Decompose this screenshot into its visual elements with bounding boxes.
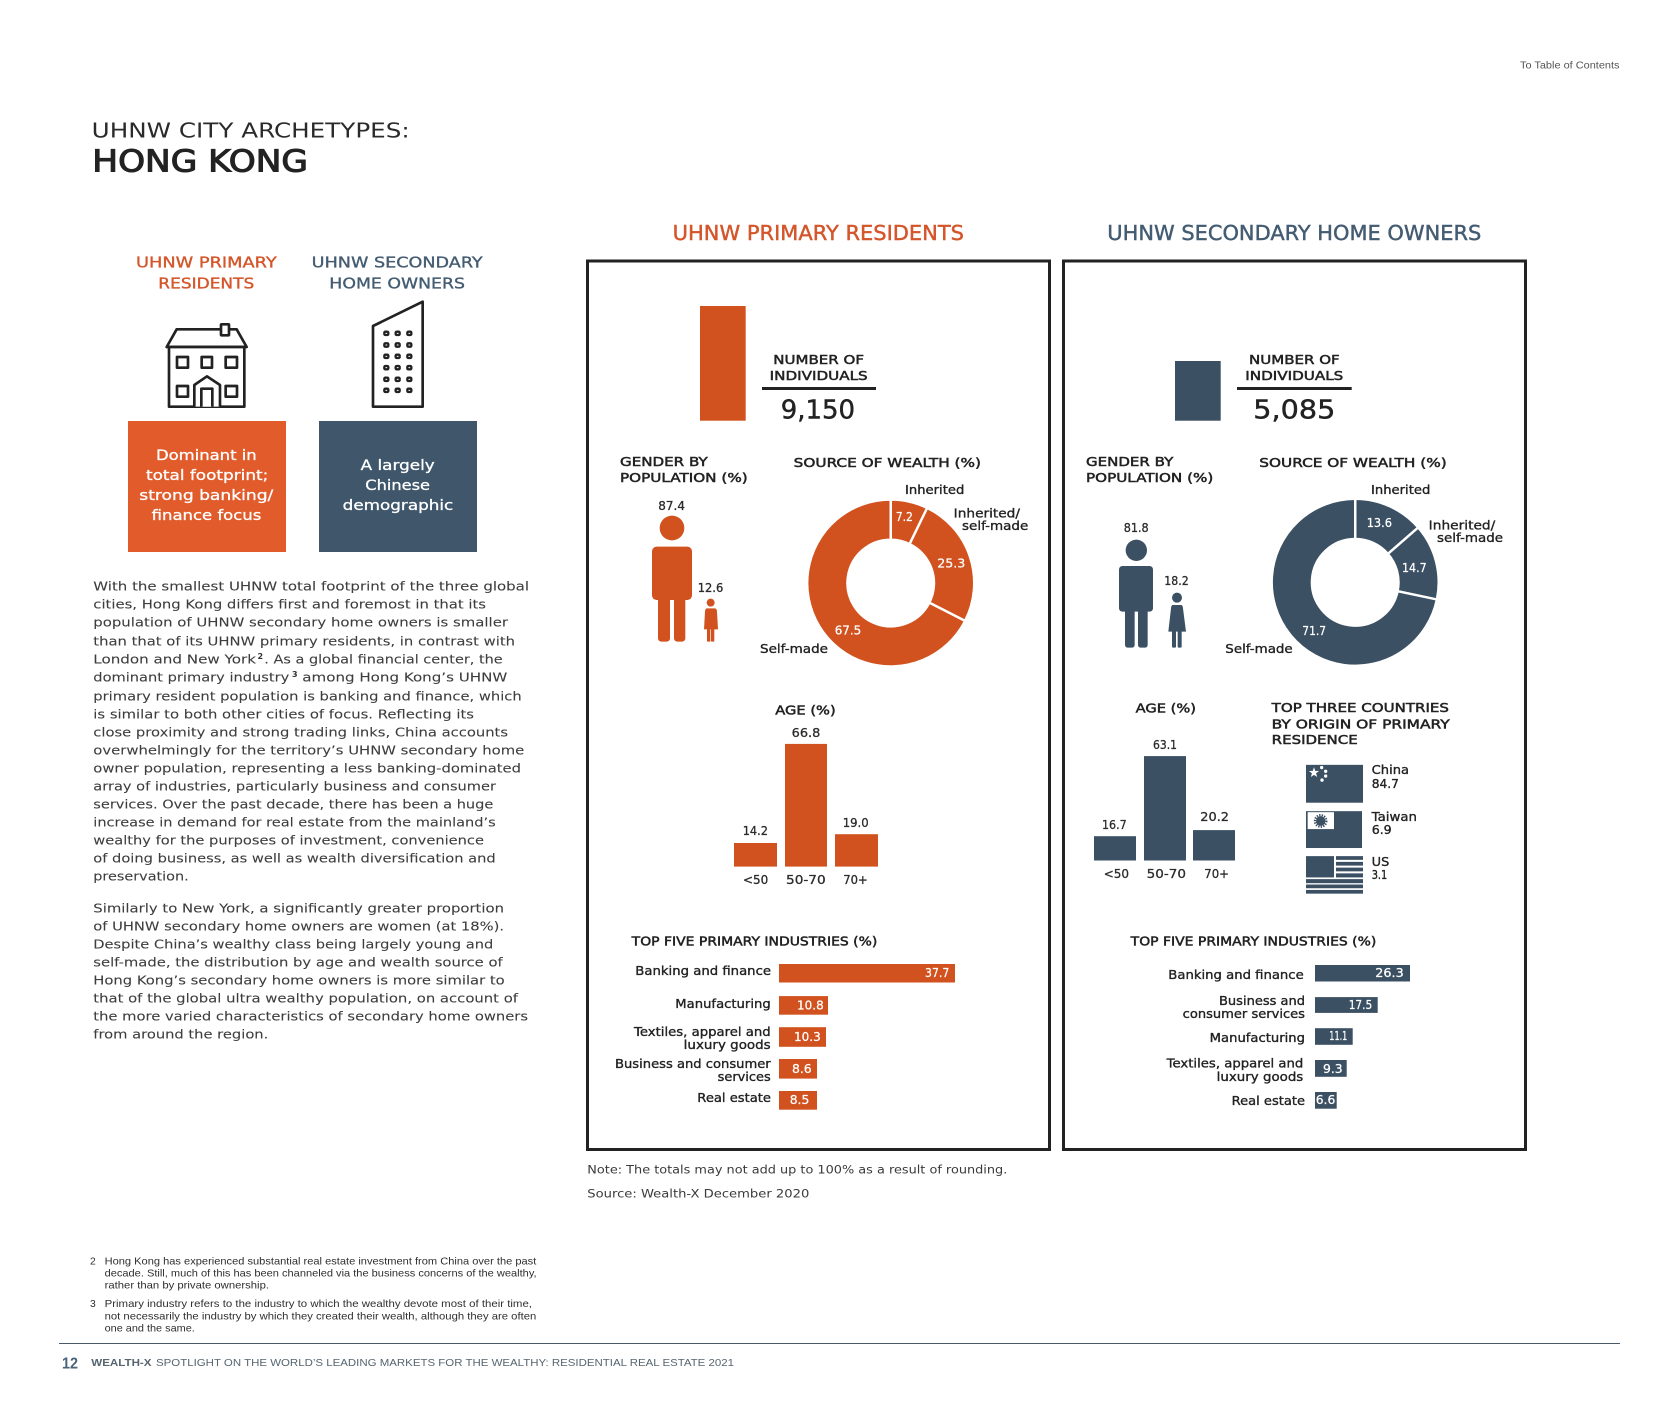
text block: body paragraph one: overwhelmingly for the territory’s UHNW secondary home [93, 743, 524, 758]
chart: top five primary industries: Banking and finance [635, 963, 771, 978]
heading: UHNW secondary home owners legend [312, 254, 484, 292]
chart: source of wealth donut: 13.6 [1367, 515, 1392, 530]
heading: gender: POPULATION (%) [1086, 471, 1213, 486]
chart: age bars: 70+ [1204, 866, 1229, 881]
text block: body paragraph two: from around the region. [93, 1027, 268, 1042]
heading: UHNW primary residents legend: UHNW PRIMARY [136, 254, 278, 272]
text block: body paragraph two: of UHNW secondary home owners are women (at 18%). [93, 919, 504, 934]
heading: secondary home owners panel: UHNW SECONDARY HOME OWNERS [1107, 221, 1481, 245]
icon: flag of Taiwan [1306, 811, 1362, 848]
chart: top five primary industries: 9.3 [1323, 1061, 1343, 1076]
stat: number of individuals: 5,085 [1253, 395, 1335, 425]
chart: source of wealth donut [1225, 482, 1503, 666]
icon: male figure [652, 516, 692, 642]
text block: body paragraph one: increase in demand for real estate from the mainland’s [93, 815, 496, 830]
heading: gender [1086, 455, 1213, 486]
chart: top five primary industries: Textiles, apparel and [633, 1024, 771, 1039]
heading: primary residents panel: UHNW PRIMARY RESIDENTS [673, 221, 964, 245]
page number: 12 [62, 1355, 78, 1372]
stat: number of individuals: INDIVIDUALS [770, 369, 868, 384]
chart: age bars: 50-70 [1147, 866, 1186, 881]
chart: top five primary industries: Real estate [697, 1090, 771, 1105]
text block: body paragraph one: population of UHNW secondary home owners is smaller [93, 615, 509, 630]
chart: gender pictogram: 87.4 [658, 498, 685, 513]
labels: country values: China [1372, 762, 1409, 777]
labels: country values: 3.1 [1372, 867, 1387, 882]
heading: gender [620, 455, 748, 486]
footnotes: 2 [90, 1256, 96, 1267]
footnotes: decade. Still, much of this has been channeled via the business concerns of the wealthy, [105, 1268, 537, 1279]
chart: source of wealth donut: 67.5 [835, 623, 861, 638]
chart: source of wealth donut [760, 482, 1029, 667]
icon: house [167, 324, 247, 407]
labels: country values: 6.9 [1372, 822, 1392, 837]
chart: source of wealth donut: self-made [1437, 530, 1503, 545]
stat: number of individuals: NUMBER OF [773, 353, 864, 368]
chart: age bars: 63.1 [1153, 737, 1177, 752]
chart: source of wealth donut: Inherited/ [1429, 517, 1496, 532]
text block: body paragraph one: among Hong Kong’s UHNW [302, 669, 507, 684]
heading: source of wealth: SOURCE OF WEALTH (%) [1259, 456, 1447, 471]
footnotes: Hong Kong has experienced substantial real estate investment from China over the past [105, 1256, 536, 1267]
chart: source of wealth donut: Inherited [1371, 482, 1430, 497]
chart: age bars: AGE (%) [1136, 702, 1196, 716]
chart: top five primary industries [1130, 934, 1410, 1109]
footnotes: one and the same. [105, 1323, 195, 1334]
link: to table of contents: To Table of Contents [1520, 60, 1620, 71]
callout: primary residents: Dominant in [156, 448, 257, 464]
chart: top five primary industries: 26.3 [1375, 965, 1404, 980]
chart: top five primary industries [615, 934, 955, 1110]
labels: country values: Taiwan [1371, 809, 1417, 824]
note and source [587, 1162, 1007, 1200]
chart: gender pictogram: 81.8 [1124, 520, 1149, 535]
chart: top five primary industries: Business and consumer [615, 1056, 772, 1071]
bar: number of individuals [1175, 361, 1221, 421]
panel: secondary home owners [1064, 261, 1526, 1150]
chart: age bars: 66.8 [792, 725, 820, 740]
callout: secondary home owners: demographic [343, 498, 453, 514]
callout: secondary home owners: A largely [361, 458, 435, 474]
heading: gender: GENDER BY [1086, 455, 1174, 470]
heading: top three countries: BY ORIGIN OF PRIMARY [1272, 717, 1450, 732]
icon: apartment tower [373, 302, 423, 407]
icon: male figure [1119, 540, 1153, 648]
stat: number of individuals: 9,150 [781, 395, 855, 425]
footer rule [59, 1343, 1620, 1344]
labels: country values: US [1372, 854, 1389, 869]
chart: top five primary industries: 8.6 [792, 1061, 812, 1076]
chart: age bars [734, 704, 878, 887]
chart: age bars [1094, 702, 1235, 881]
chart: source of wealth donut: Inherited/ [954, 505, 1021, 520]
text block: body paragraph two [93, 901, 528, 1042]
text block: body paragraph two: Similarly to New York, a significantly greater proportion [93, 901, 504, 916]
chart: age bars: 16.7 [1102, 817, 1127, 832]
chart: age bars: AGE (%) [775, 704, 836, 718]
stat: number of individuals: INDIVIDUALS [1245, 369, 1343, 384]
text block: body paragraph one: owner population, representing a less banking-dominated [93, 761, 521, 776]
chart: gender pictogram [1119, 520, 1189, 648]
chart: top five primary industries: TOP FIVE PRIMARY INDUSTRIES (%) [1130, 934, 1376, 949]
chart: top five primary industries: 8.5 [790, 1092, 809, 1107]
text block: body paragraph two: the more varied characteristics of secondary home owners [93, 1009, 528, 1024]
text block: body paragraph one: 3 [292, 670, 298, 679]
icon: flag of the US [1306, 856, 1363, 894]
chart: age bars: 50-70 [786, 872, 826, 887]
stat: number of individuals: NUMBER OF [1249, 353, 1340, 368]
chart: top five primary industries: 10.8 [797, 998, 824, 1013]
stat: number of individuals [1237, 353, 1352, 425]
chart: top five primary industries: Business and [1219, 993, 1305, 1008]
chart: age bars: 70+ [843, 872, 868, 887]
footnotes: not necessarily the industry by which they created their wealth, although they are often [105, 1311, 537, 1322]
callout: primary residents: total footprint; [146, 468, 268, 484]
text block: body paragraph one: wealthy for the purposes of investment, convenience [93, 833, 484, 848]
chart: top five primary industries: 37.7 [925, 965, 949, 980]
chart: top five primary industries: luxury goods [1217, 1069, 1303, 1084]
text block: body paragraph one: is similar to both other cities of focus. Reflecting its [93, 707, 474, 722]
text block: body paragraph one: services. Over the past decade, there has been a huge [93, 797, 493, 812]
text block: body paragraph one: dominant primary industry [93, 669, 289, 684]
chart: top five primary industries: luxury goods [684, 1037, 771, 1052]
chart: gender pictogram: 12.6 [698, 580, 723, 595]
chart: top five primary industries: consumer services [1183, 1006, 1305, 1021]
chart: source of wealth donut: 14.7 [1402, 560, 1427, 575]
chart: gender pictogram: 18.2 [1164, 573, 1189, 588]
icon: female figure [1168, 593, 1186, 648]
heading: source of wealth: SOURCE OF WEALTH (%) [794, 456, 981, 471]
icon: female figure [704, 599, 718, 642]
footnotes: rather than by private ownership. [105, 1280, 269, 1291]
labels: country values: 84.7 [1372, 776, 1399, 791]
chart: source of wealth donut: 71.7 [1302, 623, 1326, 638]
heading: UHNW secondary home owners legend: UHNW SECONDARY [312, 254, 484, 272]
title [92, 119, 410, 180]
heading: top three countries: TOP THREE COUNTRIES [1271, 701, 1449, 716]
chart: source of wealth donut: self-made [962, 518, 1029, 533]
text block: body paragraph one: primary resident population is banking and finance, which [93, 689, 522, 704]
title: UHNW CITY ARCHETYPES: [92, 119, 410, 143]
text block: body paragraph one: . As a global financial center, the [264, 651, 503, 666]
footer: running title: WEALTH-X [91, 1358, 152, 1369]
chart: top five primary industries: Banking and finance [1168, 967, 1304, 982]
chart: top five primary industries: Manufacturing [1210, 1030, 1305, 1045]
chart: top five primary industries: 6.6 [1316, 1092, 1335, 1107]
bar: number of individuals [700, 306, 746, 421]
chart: top five primary industries: Manufacturing [675, 996, 771, 1011]
text block: body paragraph one: 2 [258, 652, 263, 661]
text block: body paragraph two: Despite China’s wealthy class being largely young and [93, 937, 493, 952]
chart: source of wealth donut: Self-made [760, 641, 828, 656]
note and source: Note: The totals may not add up to 100% as a result of rounding. [587, 1162, 1007, 1176]
chart: top five primary industries: services [718, 1069, 771, 1084]
heading: top three countries: RESIDENCE [1272, 733, 1358, 748]
footnotes [90, 1256, 537, 1334]
text block: body paragraph two: that of the global ultra wealthy population, on account of [93, 991, 519, 1006]
heading: top three countries [1271, 701, 1450, 748]
panel: primary residents [588, 261, 1050, 1150]
text block: body paragraph one: preservation. [93, 869, 189, 884]
callout: secondary home owners: Chinese [365, 478, 430, 494]
text block: body paragraph one: of doing business, as well as wealth diversification and [93, 851, 496, 866]
chart: top five primary industries: 17.5 [1349, 997, 1372, 1012]
text block: body paragraph one: than that of its UHNW primary residents, in contrast with [93, 633, 515, 648]
heading: UHNW primary residents legend [136, 254, 278, 292]
chart: top five primary industries: Real estate [1232, 1093, 1305, 1108]
chart: source of wealth donut: 25.3 [937, 556, 965, 571]
heading: gender: POPULATION (%) [620, 471, 748, 486]
callout: primary residents: strong banking/ [139, 488, 274, 504]
chart: top five primary industries: 11.1 [1329, 1028, 1347, 1043]
callout: secondary home owners [319, 421, 477, 552]
text block: body paragraph one: cities, Hong Kong differs first and foremost in that its [93, 597, 486, 612]
chart: source of wealth donut: Self-made [1225, 641, 1293, 656]
labels: country values [1371, 762, 1417, 882]
text block: body paragraph one [93, 579, 529, 884]
chart: age bars: 19.0 [843, 815, 869, 830]
chart: age bars: 20.2 [1200, 809, 1229, 824]
heading: UHNW secondary home owners legend: HOME OWNERS [329, 274, 465, 292]
title: HONG KONG [92, 145, 308, 180]
text block: body paragraph one: array of industries, particularly business and consumer [93, 779, 497, 794]
text block: body paragraph two: Hong Kong’s secondary home owners is more similar to [93, 973, 505, 988]
footer: running title: SPOTLIGHT ON THE WORLD’S LEADING MARKETS FOR THE WEALTHY: RESIDENTIAL REAL ESTATE 2021 [156, 1358, 734, 1369]
chart: gender pictogram [652, 498, 723, 642]
callout: primary residents [128, 421, 286, 552]
chart: age bars: <50 [1104, 866, 1129, 881]
callout: primary residents: finance focus [152, 508, 261, 524]
footnotes: Primary industry refers to the industry to which the wealthy devote most of their time, [105, 1299, 532, 1310]
heading: UHNW primary residents legend: RESIDENTS [158, 274, 254, 292]
text block: body paragraph two: self-made, the distribution by age and wealth source of [93, 955, 503, 970]
chart: top five primary industries: TOP FIVE PRIMARY INDUSTRIES (%) [631, 934, 877, 949]
chart: top five primary industries: Textiles, apparel and [1166, 1056, 1303, 1071]
chart: age bars: <50 [743, 872, 768, 887]
chart: age bars: 14.2 [743, 823, 768, 838]
chart: source of wealth donut: 7.2 [896, 509, 913, 524]
stat: number of individuals [762, 353, 876, 425]
note and source: Source: Wealth-X December 2020 [587, 1186, 809, 1200]
text block: body paragraph one: With the smallest UHNW total footprint of the three global [93, 579, 529, 594]
footnotes: 3 [90, 1299, 96, 1310]
text block: body paragraph one: London and New York [93, 651, 257, 666]
text block: body paragraph one: close proximity and strong trading links, China accounts [93, 725, 508, 740]
icon: flag of China [1306, 765, 1363, 803]
chart: source of wealth donut: Inherited [905, 482, 964, 497]
chart: top five primary industries: 10.3 [794, 1029, 821, 1044]
heading: gender: GENDER BY [620, 455, 708, 470]
